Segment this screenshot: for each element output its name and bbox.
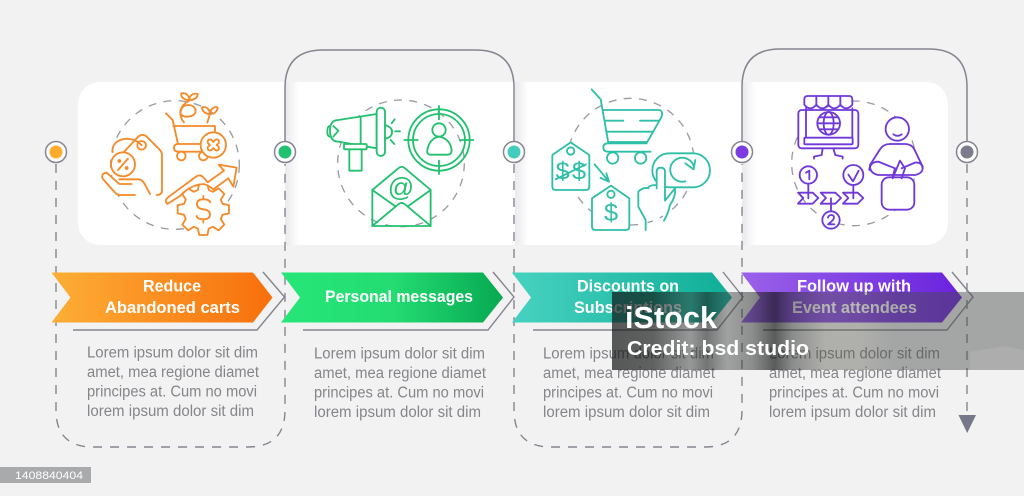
text block 4: lorem ipsum dolor sit dim bbox=[769, 404, 936, 421]
text block 2: lorem ipsum dolor sit dim bbox=[314, 404, 481, 421]
text block 4: Lorem ipsum dolor sit dim bbox=[769, 346, 940, 362]
white icon panel bbox=[78, 82, 948, 245]
icon: discounts on subscriptions: $ bbox=[572, 158, 586, 186]
text block 1: amet, mea regione diamet bbox=[87, 364, 260, 381]
text block 3: amet, mea regione diamet bbox=[543, 365, 716, 382]
icon: discounts on subscriptions bbox=[552, 89, 710, 230]
icon: discounts on subscriptions: $ bbox=[556, 158, 570, 186]
step 4 chevron: Follow up with bbox=[797, 278, 911, 296]
icon: event attendees bbox=[792, 96, 923, 229]
text block 3: lorem ipsum dolor sit dim bbox=[543, 404, 710, 421]
arrowhead bbox=[958, 415, 976, 433]
text block 2: principes at. Cum no movi bbox=[314, 384, 484, 402]
text block 3: Lorem ipsum dolor sit dim bbox=[543, 346, 714, 362]
text block 2 bbox=[314, 346, 487, 421]
icon: personal messages bbox=[327, 100, 473, 227]
text block 3: principes at. Cum no movi bbox=[543, 384, 713, 402]
step 1 chevron: Abandoned carts bbox=[105, 299, 240, 317]
node 5 bbox=[956, 142, 978, 162]
text block 1 bbox=[87, 344, 260, 420]
step 3 chevron: Discounts on bbox=[577, 278, 679, 296]
text block 1: Lorem ipsum dolor sit dim bbox=[87, 344, 258, 362]
icon: discounts on subscriptions: $ bbox=[604, 199, 618, 227]
step 2 chevron bbox=[281, 272, 514, 330]
watermark credit: Credit: bsd studio bbox=[627, 338, 809, 360]
text block 1: principes at. Cum no movi bbox=[87, 384, 257, 400]
node 2 bbox=[274, 142, 296, 162]
text block 4: principes at. Cum no movi bbox=[769, 384, 939, 402]
image id tag bbox=[0, 467, 91, 483]
text block 2: amet, mea regione diamet bbox=[314, 365, 487, 382]
timeline connector bbox=[56, 49, 967, 447]
step 3 chevron: Subscriptions bbox=[574, 299, 682, 317]
step 4 chevron: Event attendees bbox=[792, 299, 917, 317]
text block 2: Lorem ipsum dolor sit dim bbox=[314, 346, 485, 362]
step 4 chevron bbox=[741, 272, 973, 330]
text block 4 bbox=[769, 346, 942, 421]
text block 1: lorem ipsum dolor sit dim bbox=[87, 403, 254, 420]
step 1 chevron: Reduce bbox=[143, 278, 201, 296]
step 3 chevron bbox=[512, 272, 743, 330]
icon: abandoned carts bbox=[102, 93, 239, 235]
text block 4: amet, mea regione diamet bbox=[769, 365, 942, 382]
step 1 chevron bbox=[52, 272, 284, 330]
node 3 bbox=[504, 142, 524, 162]
watermark brand: iStock bbox=[625, 300, 718, 335]
icon: personal messages: @ bbox=[388, 172, 414, 202]
node 4 bbox=[732, 142, 752, 162]
image id tag: 1408840404 bbox=[15, 470, 83, 482]
node 1 bbox=[46, 142, 66, 162]
step 2 chevron: Personal messages bbox=[325, 288, 473, 306]
watermark band bbox=[612, 292, 1024, 370]
text block 3 bbox=[543, 346, 716, 421]
